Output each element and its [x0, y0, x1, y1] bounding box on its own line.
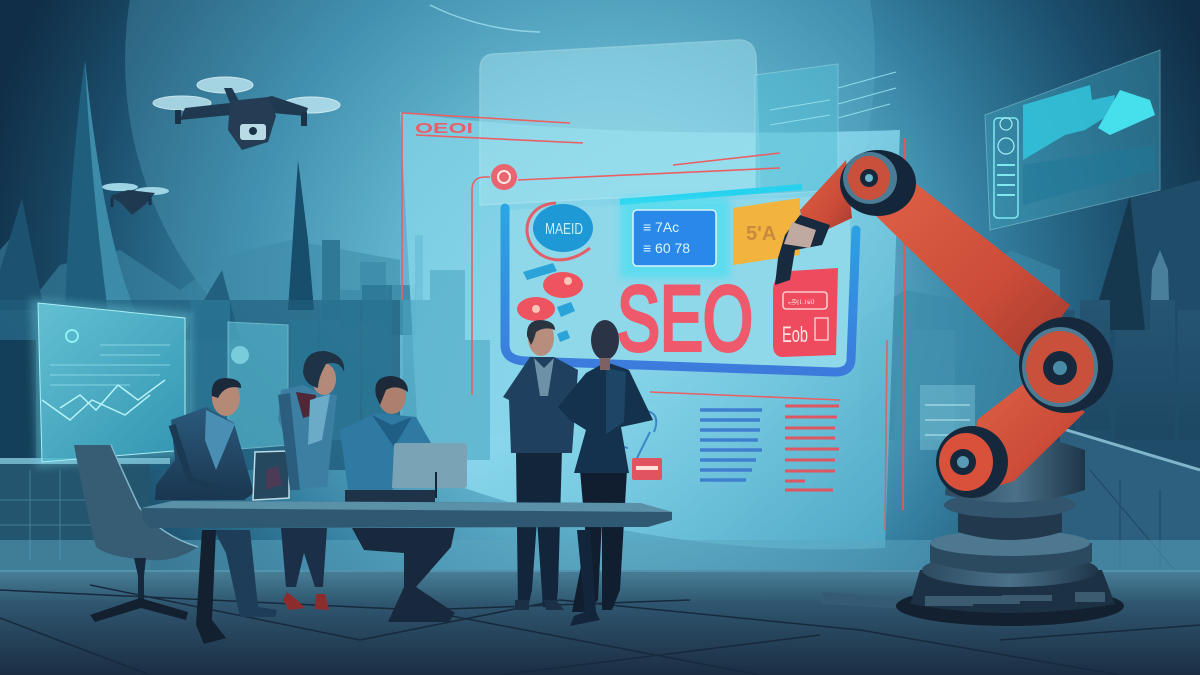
- robot base: [896, 442, 1124, 626]
- person: woman from behind: [558, 320, 653, 612]
- card: red SEO tile: Eob: [782, 322, 808, 347]
- table: [141, 495, 672, 644]
- robot arm: gripper forearm: [800, 160, 852, 240]
- balcony wall right: [1060, 428, 1200, 600]
- card: blue stats: [620, 198, 730, 278]
- icon: MAEID speech bubble: [527, 203, 593, 260]
- person: standing man: [503, 320, 578, 610]
- title: SEO: SEO: [617, 268, 753, 370]
- card: red SEO tile: [773, 268, 838, 357]
- robot joint: upper: [840, 150, 916, 216]
- icon: cloud and stamp: [617, 410, 662, 480]
- left wall ledge: [0, 458, 170, 572]
- left city skyline: [0, 60, 416, 470]
- background moon arc: [125, 0, 1200, 435]
- icon: MAEID speech bubble: MAEID: [545, 221, 583, 238]
- card: yellow tile: [733, 198, 800, 265]
- chair: [74, 445, 198, 622]
- left data screen: [30, 298, 288, 468]
- city seen through glass: [403, 235, 490, 460]
- card: blue stats: ≡ 60 78: [643, 240, 690, 256]
- icon: red share nodes: [517, 263, 583, 342]
- label: red OEOI header: OEOI: [415, 120, 473, 137]
- panel: SEO screen frame: [505, 187, 856, 376]
- robot arm: upper segment: [870, 175, 1070, 365]
- floor: [0, 540, 1200, 675]
- robot arm: lower segment: [968, 378, 1085, 495]
- right hologram display: [985, 50, 1160, 230]
- robot joint: base: [936, 426, 1008, 498]
- card: yellow tile: 5'A: [746, 223, 776, 245]
- tablet on table: [253, 451, 289, 500]
- person: seated man with laptop: [340, 376, 455, 622]
- card: blue stats: ≡ 7Ac: [643, 219, 679, 235]
- robot gripper: [775, 215, 830, 285]
- person: woman leaning: [278, 351, 344, 610]
- drone: small: [102, 183, 169, 215]
- person: seated man left: [155, 378, 277, 617]
- drone: large: [153, 77, 340, 150]
- hologram: lower bar lists: [700, 406, 839, 490]
- laptop: [392, 443, 467, 498]
- robot joint: elbow: [1019, 317, 1113, 413]
- icon: red target node: [491, 164, 517, 190]
- right city skyline: [860, 180, 1200, 480]
- card: red SEO tile: அபல: [788, 296, 815, 307]
- panel: central holographic glass: [400, 40, 900, 549]
- red circuit lines: [402, 113, 905, 530]
